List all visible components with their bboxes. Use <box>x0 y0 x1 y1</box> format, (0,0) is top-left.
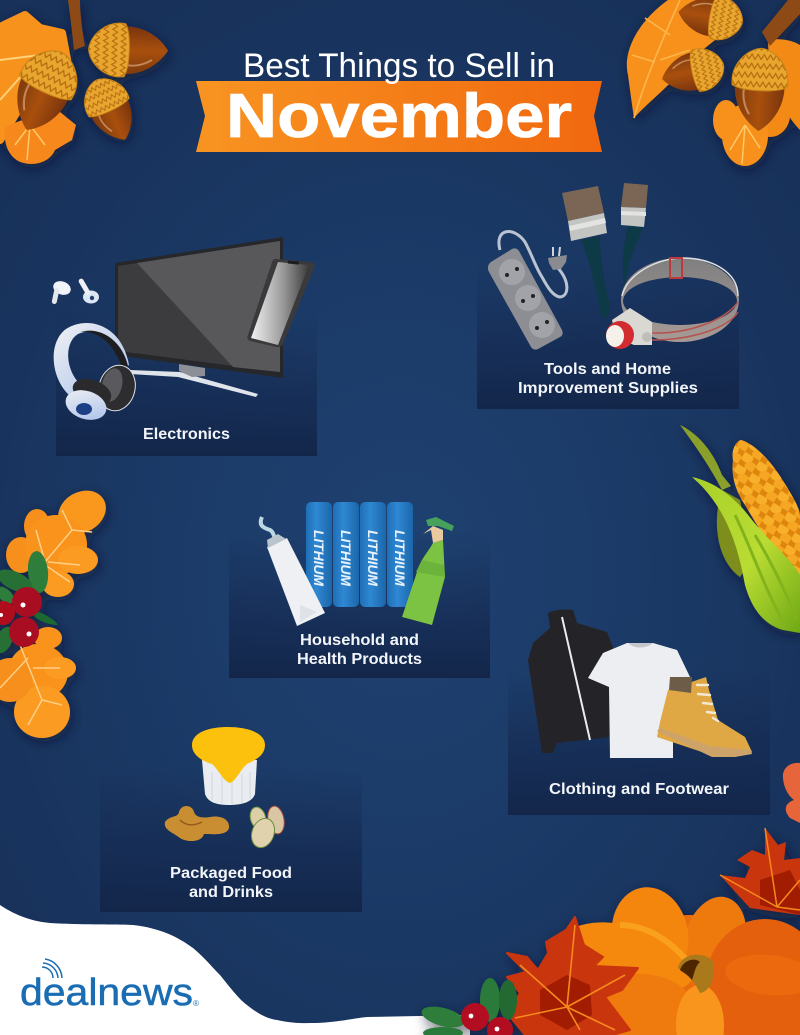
label: Improvement Supplies: Improvement Supplies <box>518 380 698 397</box>
panel: Electronics <box>51 237 317 456</box>
icon: lithium batteries: LITHIUM <box>311 530 327 586</box>
signal arcs <box>42 959 62 978</box>
panel: Tools and Home Improvement Supplies <box>477 183 739 409</box>
icon: cashews <box>165 806 229 841</box>
logo: dealnews <box>20 959 199 1014</box>
icon: pistachios <box>248 805 286 851</box>
panel: Clothing and Footwear <box>508 609 770 815</box>
decoration: small leaf right edge <box>783 763 800 823</box>
electronics card background <box>56 310 317 456</box>
household card background <box>229 531 490 678</box>
icon: television <box>115 237 283 397</box>
icon: narrow paint brush <box>621 183 648 285</box>
icon: white t-shirt <box>588 643 690 758</box>
title word: November: November <box>226 82 572 151</box>
icon: green spray bottle <box>402 517 454 625</box>
decoration: corn on the cob <box>680 425 800 633</box>
label: Clothing and Footwear: Clothing and Footwear <box>549 781 729 798</box>
title line: Best Things to Sell in: Best Things to Sell in <box>243 47 555 85</box>
label: Household and: Household and <box>300 632 419 649</box>
label: Electronics: Electronics <box>143 426 230 443</box>
packaged food card background <box>100 766 362 912</box>
decoration: oak leaves and berries left <box>0 482 114 738</box>
icon: tan boot <box>657 677 752 757</box>
icon: lithium batteries <box>306 502 413 607</box>
icon: lithium batteries: LITHIUM <box>365 530 381 586</box>
panel: Household and Health Products <box>229 502 490 678</box>
maple leaf behind pumpkin <box>720 828 800 915</box>
maple leaf front <box>507 917 638 1035</box>
wordmark: dealnews <box>20 972 193 1014</box>
decoration: acorns and leaf top right <box>627 0 800 166</box>
title <box>196 47 602 152</box>
label: Packaged Food: Packaged Food <box>170 865 292 882</box>
icon: black jacket <box>528 609 613 753</box>
icon: smartphone <box>247 259 315 347</box>
icon: headlamp <box>606 258 739 349</box>
icon: lithium batteries: LITHIUM <box>338 530 354 586</box>
green leaves and red berries <box>419 978 517 1035</box>
icon: ointment tube <box>261 517 325 626</box>
decoration: pumpkin with maple leaves and berries <box>419 828 800 1035</box>
icon: wide paint brush <box>562 186 610 318</box>
decoration: acorns and oak leaves top left <box>0 0 169 164</box>
upper oak leaf <box>6 482 114 597</box>
icon: earbuds <box>51 278 99 304</box>
icon: portion cup <box>192 727 265 805</box>
icon: headphones <box>54 323 140 425</box>
pumpkin <box>554 881 800 1035</box>
label: and Drinks: and Drinks <box>189 884 273 901</box>
panel: Packaged Food and Drinks <box>100 727 362 912</box>
green leaves and red berries <box>0 550 58 656</box>
label: Health Products: Health Products <box>297 651 422 668</box>
icon: extension cord <box>488 232 567 350</box>
tools card background <box>477 262 739 409</box>
orange ribbon banner <box>196 81 602 152</box>
clothing card background <box>508 668 770 815</box>
white wave footer <box>0 905 470 1035</box>
registered mark: ® <box>193 999 199 1008</box>
lower oak leaf <box>0 627 76 738</box>
icon: lithium batteries: LITHIUM <box>392 530 408 586</box>
label: Tools and Home: Tools and Home <box>544 361 671 378</box>
